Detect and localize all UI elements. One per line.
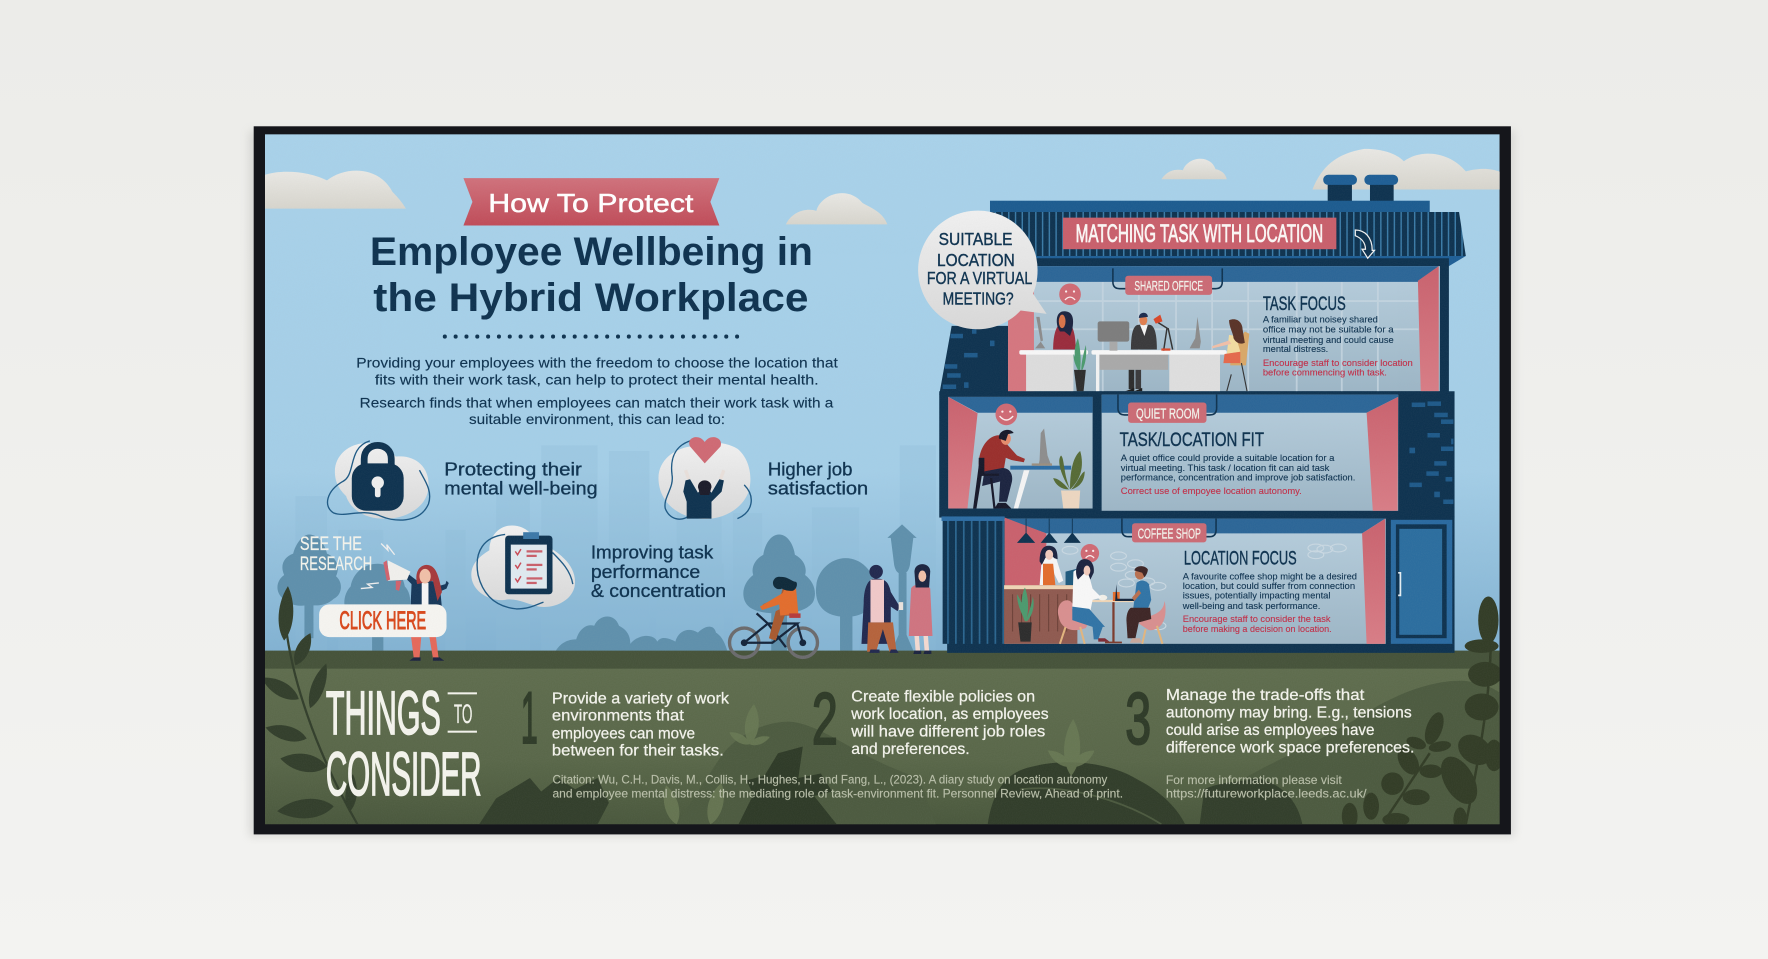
- icon: shout marks: [361, 543, 395, 589]
- text: location focus: well-being and task performance.: [1182, 601, 1320, 611]
- wall bricks, middle floor: [1409, 401, 1453, 504]
- text: point 2: and preferences.: [851, 741, 970, 758]
- front door: [1391, 520, 1452, 644]
- callout: speech bubble: [918, 211, 1047, 329]
- person: woman in white shirt on pink chair: [1058, 559, 1110, 644]
- hanger brackets and tag: shared office: SHARED OFFICE: [1134, 277, 1203, 293]
- benefit: job satisfaction: [658, 437, 868, 519]
- room: focus pod: [948, 397, 1093, 509]
- numeral 3: 3: [1125, 678, 1151, 760]
- sky: [265, 134, 1500, 653]
- text: task focus: [1263, 294, 1413, 377]
- text: location focus: location, but could suffer from connection: [1183, 581, 1355, 591]
- foliage: left plant: [258, 586, 358, 824]
- label: mental well-being: [444, 458, 598, 498]
- icon: person raising heart on blob: [658, 437, 751, 519]
- monitor: back view: [1098, 321, 1129, 351]
- tree: far left: [277, 534, 341, 638]
- text: point 1: Provide a variety of work: [552, 690, 729, 707]
- hanger brackets and tag: quiet room: [1118, 395, 1217, 423]
- citation: [552, 773, 1123, 801]
- tree: beside megaphone: [344, 564, 410, 651]
- label: mental well-being: Protecting their: [444, 458, 582, 479]
- hanger brackets and tag: coffee shop: COFFEE SHOP: [1138, 526, 1201, 542]
- banner: how to protect: [463, 178, 719, 226]
- more information link: [1166, 773, 1367, 801]
- intro text: Providing your employees with the freedom to choose the location that: [356, 355, 838, 371]
- figure: woman with megaphone: [383, 560, 449, 661]
- person: man in blue shirt on pink chair: [1126, 566, 1166, 644]
- text: location focus: before making a decision on location.: [1183, 624, 1332, 634]
- faint city skyline: [295, 445, 936, 651]
- figure: cyclist: [730, 577, 817, 657]
- person: woman at desk: [1212, 319, 1249, 391]
- megaphone: [388, 560, 410, 581]
- text: task focus: mental distress.: [1263, 344, 1328, 354]
- label: mental well-being: mental well-being: [444, 477, 598, 498]
- person: man in dark suit: [1125, 313, 1157, 391]
- benefit: mental well-being: [327, 441, 598, 520]
- barista: [1040, 546, 1063, 585]
- icon: smiling face: [996, 404, 1017, 425]
- hill: right: [1240, 681, 1502, 824]
- handwritten prompt: RESEARCH: [300, 554, 372, 575]
- light leaves: [660, 703, 1097, 826]
- paper grain overlay: [265, 134, 1500, 824]
- label: task performance: [591, 543, 726, 601]
- main title: the Hybrid Workplace: [373, 276, 808, 320]
- text: task focus: Encourage staff to consider location: [1263, 358, 1413, 368]
- tree: behind cyclist: [743, 534, 815, 651]
- plant: desk plant: [1073, 338, 1086, 391]
- text: point 1: environments that: [552, 708, 685, 725]
- text: point 3: Manage the trade-offs that: [1166, 687, 1365, 704]
- bushes: [556, 616, 727, 651]
- text: location focus: [1182, 548, 1357, 634]
- hanger brackets and tag: quiet room: QUIET ROOM: [1136, 406, 1200, 422]
- text: task location fit: A quiet office could provide a suitable location for a: [1121, 453, 1335, 463]
- benefit: task performance: [471, 525, 726, 609]
- black picture frame: [254, 126, 1511, 834]
- monstera: lower right dark leaf: [1200, 778, 1302, 824]
- intro text: fits with their work task, can help to protect their mental health.: [375, 372, 819, 388]
- icon: curved arrow: [1355, 230, 1374, 258]
- more information link: For more information please visit: [1166, 773, 1343, 787]
- lamp post: [887, 524, 917, 651]
- text: location focus: Encourage staff to consider the task: [1183, 614, 1331, 624]
- middle floor outer wall: [939, 391, 1455, 518]
- text: location focus: LOCATION FOCUS: [1184, 548, 1297, 569]
- citation: and employee mental distress: the mediating role of task-environment fit. Personnel Review, Ahead of print.: [552, 787, 1123, 801]
- text: task location fit: [1120, 430, 1355, 496]
- figure: couple talking: [861, 564, 932, 654]
- text: task focus: TASK FOCUS: [1263, 294, 1346, 315]
- call to action: see the research: [300, 534, 449, 661]
- text: point 3: autonomy may bring. E.g., tensions: [1166, 704, 1412, 721]
- text: point 3: [1166, 687, 1415, 756]
- callout: speech bubble: LOCATION: [937, 250, 1015, 270]
- left slatted shutters: [942, 516, 1005, 644]
- desk lamp: [1153, 315, 1173, 351]
- coffee counter: [1004, 585, 1077, 644]
- heading: things to consider: [326, 679, 481, 808]
- text: point 2: Create flexible policies on: [851, 689, 1035, 706]
- text: task location fit: virtual meeting. This task / location fit can aid task: [1121, 463, 1330, 473]
- cafe table: [1088, 584, 1135, 643]
- label: job satisfaction: [768, 458, 868, 498]
- text: task focus: virtual meeting and could cause: [1263, 335, 1394, 345]
- text: task location fit: performance, concentration and improve job satisfaction.: [1121, 473, 1355, 483]
- text: point 2: [850, 689, 1049, 758]
- poster artwork: CONSIDER: [326, 740, 481, 808]
- heading: things to consider: TO: [454, 699, 472, 729]
- screen: left monitor: [1035, 317, 1045, 348]
- monstera: centre dark leaf: [739, 746, 837, 824]
- button: click here: CLICK HERE: [339, 608, 426, 635]
- top floor outer wall: [939, 258, 1449, 395]
- room: coffee shop: [1004, 518, 1386, 644]
- citation: Citation: Wu, C.H., Davis, M., Collis, H., Hughes, H. and Fang, L., (2023). A diary study on location autonomy: [552, 773, 1107, 787]
- ground floor outer wall: [947, 516, 1455, 653]
- text: point 3: difference work space preferences.: [1166, 739, 1415, 756]
- label: job satisfaction: Higher job: [768, 458, 852, 479]
- foliage: right plant: [1342, 596, 1503, 832]
- monstera: right large dark leaf: [988, 762, 1185, 824]
- dotted divider: [445, 335, 737, 338]
- person: woman in burgundy: [1053, 311, 1076, 350]
- icon: sad face: [1059, 283, 1081, 305]
- point 2: [812, 678, 1049, 760]
- label: job satisfaction: satisfaction: [768, 477, 868, 498]
- text: location focus: A favourite coffee shop might be a desired: [1183, 572, 1357, 582]
- screen: right monitor: [1190, 317, 1201, 348]
- hanger brackets and tag: coffee shop: [1122, 519, 1216, 542]
- cloud: top left: [265, 171, 406, 209]
- point 1: [521, 677, 729, 759]
- cloud: small top: [1161, 159, 1227, 179]
- point 3: [1125, 678, 1415, 760]
- handwritten prompt: [300, 534, 372, 575]
- infographic poster on wall: [246, 126, 1517, 837]
- intro text: suitable environment, this can lead to:: [469, 411, 725, 427]
- person: man in red sweater: [973, 430, 1025, 509]
- point 1: 1: [521, 677, 538, 759]
- intro text: [356, 355, 838, 427]
- text: task focus: office may not be suitable for a: [1263, 325, 1395, 335]
- ground: [265, 668, 1500, 825]
- text: task location fit: Correct use of empoyee location autonomy.: [1121, 486, 1302, 496]
- plant: potted plant: [1053, 451, 1085, 509]
- text: task focus: before commencing with task.: [1263, 367, 1387, 377]
- callout: speech bubble: MEETING?: [943, 288, 1014, 308]
- text: point 1: between for their tasks.: [552, 742, 724, 759]
- text: point 2: work location, as employees: [850, 706, 1049, 723]
- tree: behind couple: [816, 558, 875, 651]
- cloud: top right: [1312, 149, 1502, 189]
- hanger brackets and tag: shared office: [1113, 268, 1222, 295]
- monstera: left dark leaf: [479, 778, 609, 824]
- main title: [370, 230, 813, 320]
- roof: [981, 201, 1466, 266]
- poster artwork: [258, 134, 1503, 832]
- text: point 1: employees can move: [552, 725, 695, 742]
- callout: speech bubble: SUITABLE: [939, 229, 1013, 249]
- foliage: ground hills and big leaves: [258, 586, 1503, 832]
- text: task location fit: TASK/LOCATION FIT: [1120, 430, 1264, 451]
- steam doodles: [1062, 544, 1346, 630]
- text: point 1: [552, 690, 729, 759]
- more information link: https://futureworkplace.leeds.ac.uk/: [1166, 787, 1367, 801]
- frame shadow: [249, 131, 1514, 837]
- text: task focus: A familiar but noisey shared: [1263, 314, 1378, 324]
- callout: speech bubble: FOR A VIRTUAL: [927, 268, 1033, 288]
- person in pink coat: [909, 584, 932, 636]
- matching task banner: [1063, 218, 1336, 249]
- room: quiet room: [1102, 395, 1398, 511]
- desk and monitor: [1010, 428, 1071, 509]
- label: task performance: Improving task: [591, 543, 714, 563]
- wall bricks, top floor: [943, 329, 994, 389]
- matching task banner: MATCHING TASK WITH LOCATION: [1076, 221, 1323, 248]
- room: shared office: [992, 266, 1440, 391]
- text: location focus: issues, potentially impacting mental: [1183, 591, 1331, 601]
- button: click here: [319, 604, 447, 637]
- banner: how to protect: How To Protect: [488, 190, 694, 218]
- person in dark coat: [861, 578, 900, 644]
- heading: things to consider: THINGS: [326, 679, 441, 747]
- building: matching task with location: [918, 175, 1466, 653]
- label: task performance: & concentration: [591, 581, 726, 601]
- icon: clipboard on blob: [471, 525, 575, 609]
- cash register: [1066, 563, 1085, 585]
- icon: padlock on blob: [327, 441, 430, 520]
- office desks: [1019, 350, 1227, 391]
- path strip: [265, 651, 1500, 669]
- label: task performance: performance: [591, 562, 700, 582]
- intro text: Research finds that when employees can match their work task with a: [360, 395, 833, 411]
- hill: centre: [677, 722, 936, 824]
- chimneys: [1323, 175, 1398, 205]
- cloud: middle: [786, 193, 887, 224]
- pendant lamps: [1018, 519, 1080, 542]
- text: point 2: will have different job roles: [850, 723, 1046, 740]
- plant: counter plant: [1017, 587, 1034, 642]
- main title: Employee Wellbeing in: [370, 230, 813, 274]
- text: point 3: could arise as employees have: [1166, 722, 1374, 739]
- background trees: [277, 524, 917, 651]
- icon: sad face: [1081, 544, 1099, 563]
- handwritten prompt: SEE THE: [300, 534, 362, 555]
- numeral 2: 2: [812, 678, 838, 760]
